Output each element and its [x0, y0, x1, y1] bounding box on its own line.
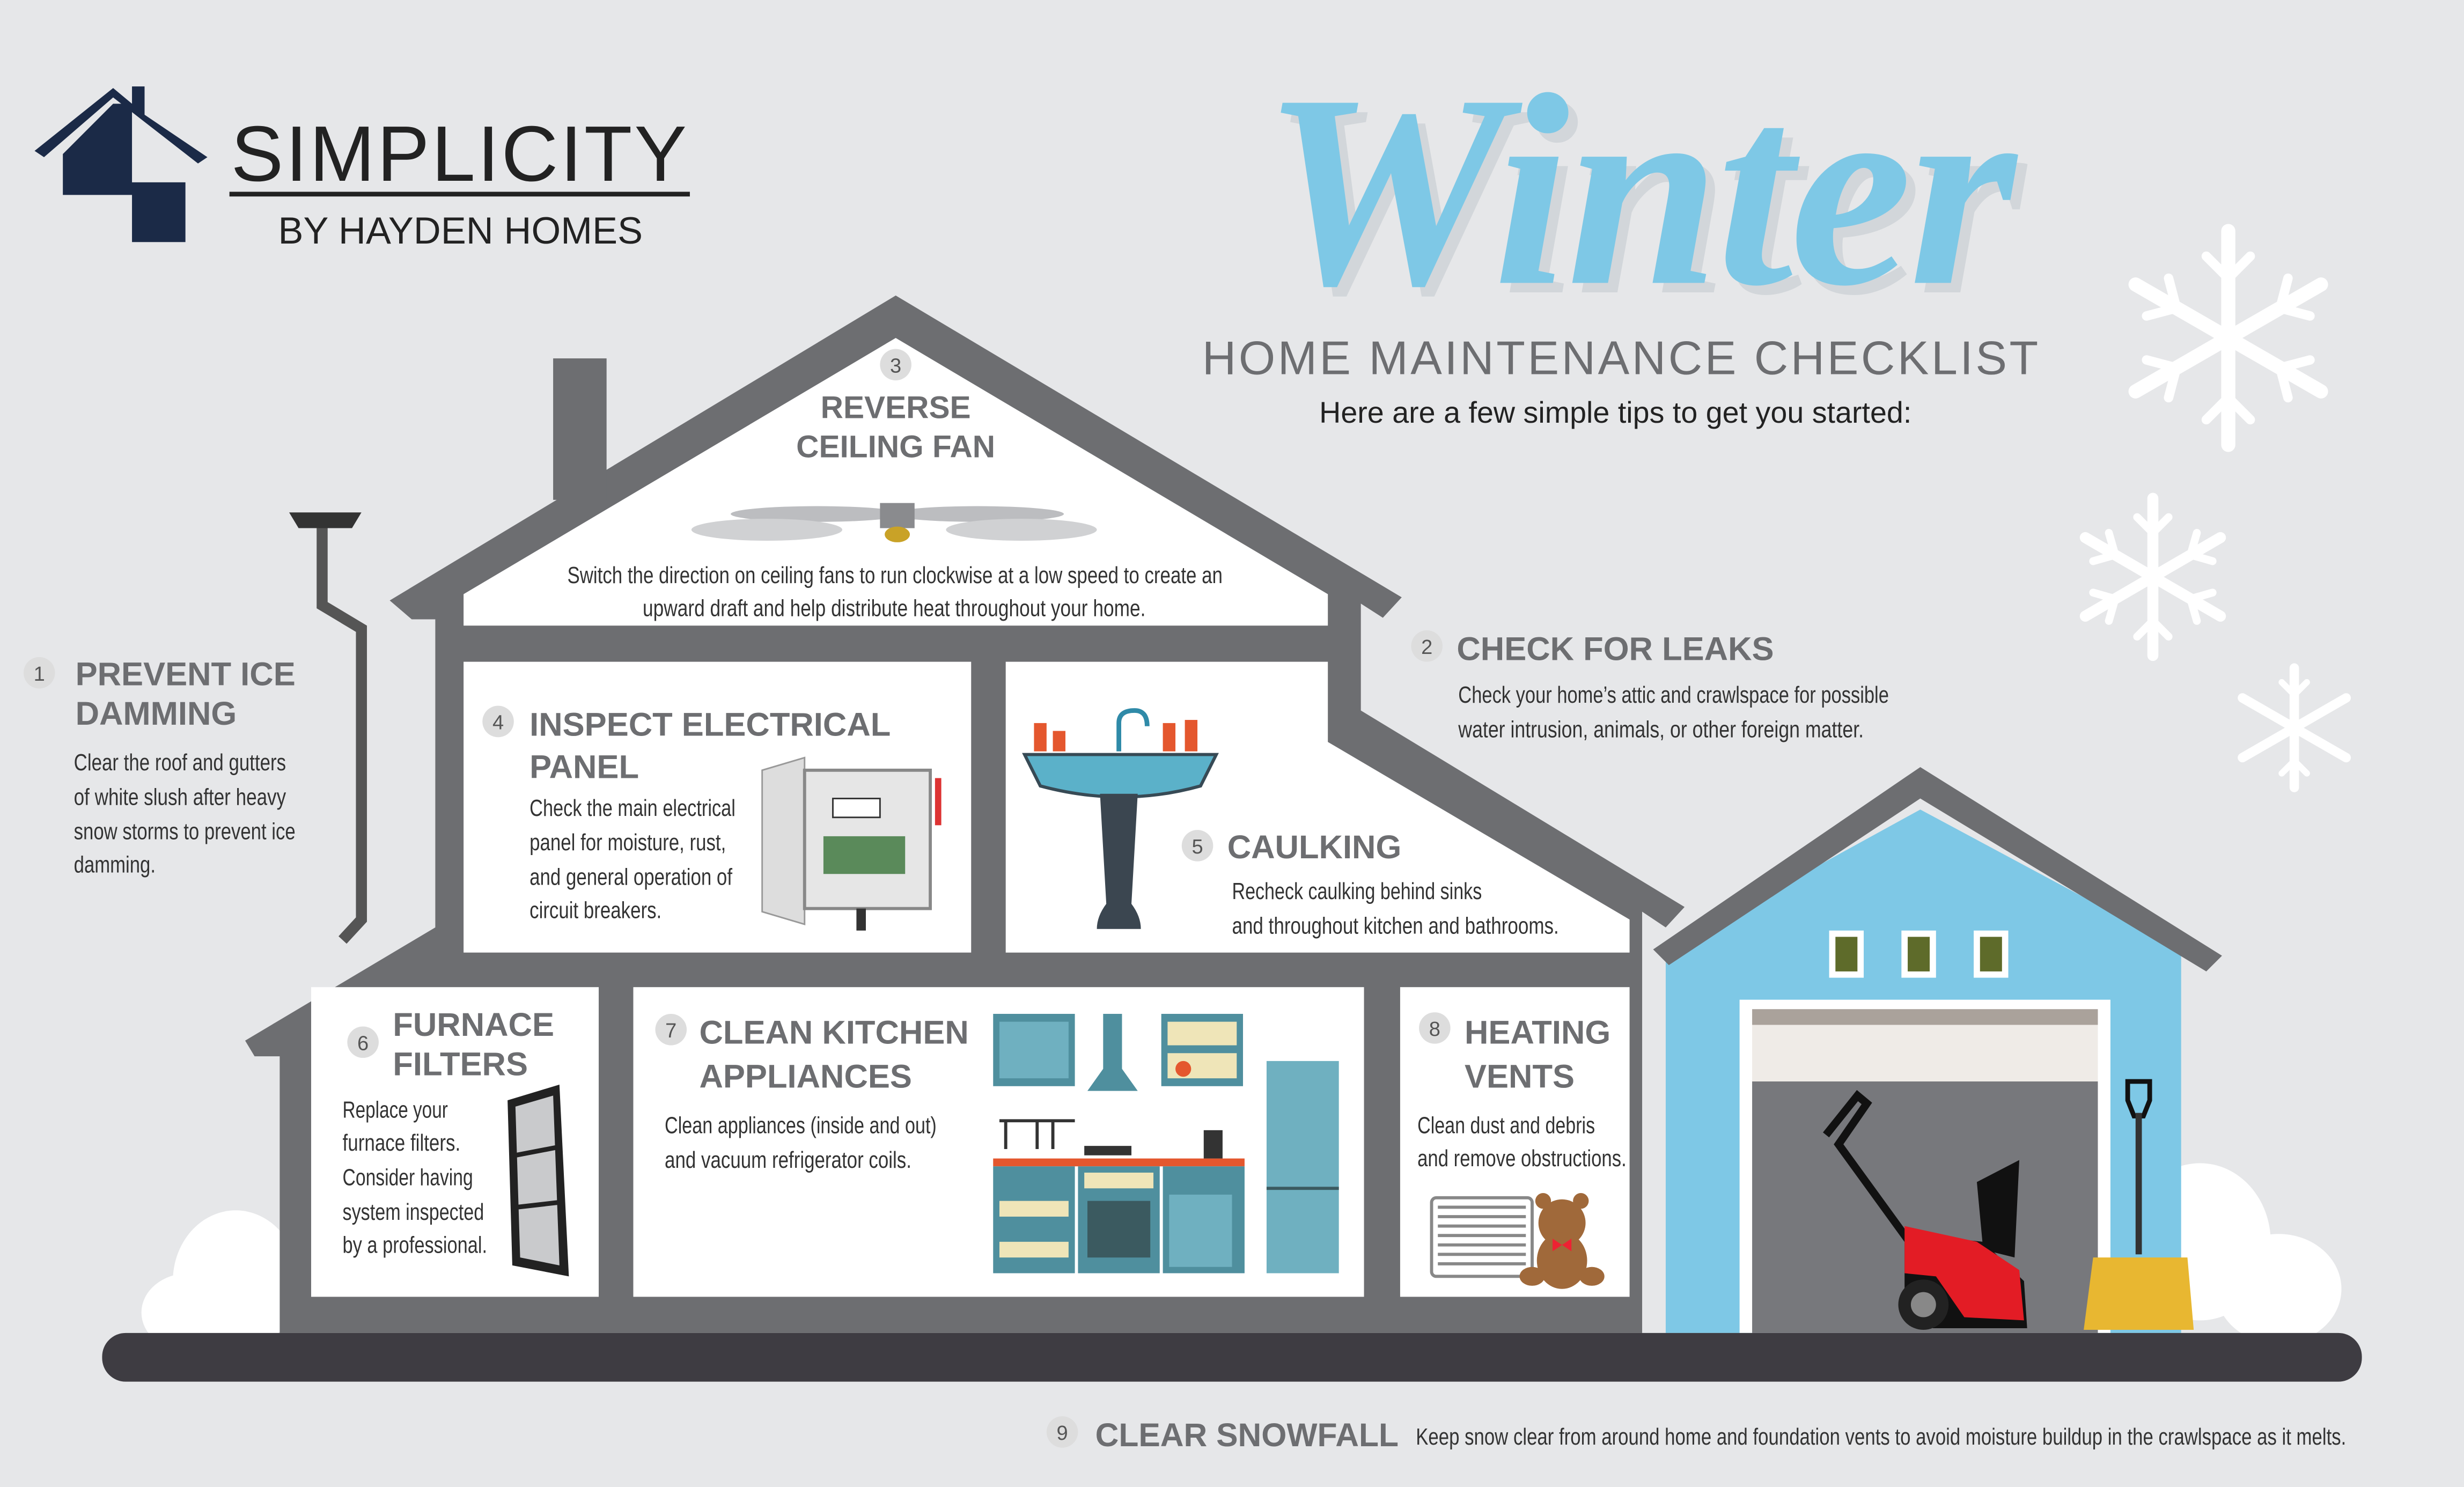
title: Winter: Winter: [1271, 47, 2031, 352]
panel: heating vents (8): and remove obstructions.: [1417, 1145, 1627, 1172]
panel: electrical (4): and general operation of: [529, 864, 733, 890]
panel: heating vents (8): 8: [1429, 1018, 1440, 1041]
text block: 1 prevent ice damming: Clear the roof and gutters: [74, 749, 286, 776]
panel: kitchen (7): [633, 987, 1364, 1297]
icon: snow blower: [1826, 1095, 2027, 1330]
text block: 1 prevent ice damming: of white slush after heavy: [74, 784, 286, 810]
panel: caulking (5): Recheck caulking behind sinks: [1232, 878, 1482, 904]
panel: electrical (4): [464, 662, 971, 953]
panel: furnace filters (6): Replace your: [343, 1096, 448, 1123]
text block: 2 check for leaks: 2: [1421, 636, 1432, 659]
panel: heating vents (8): [1400, 987, 1630, 1297]
panel: electrical (4): 4: [492, 712, 504, 734]
text block: 1 prevent ice damming: [24, 656, 296, 878]
text block: 2 check for leaks: [1411, 630, 1889, 742]
panel: heating vents (8): Clean dust and debris: [1417, 1113, 1595, 1139]
panel: kitchen (7): Clean appliances (inside and out): [665, 1113, 937, 1139]
ground bar: [102, 1333, 2362, 1382]
snow clouds: [142, 1163, 2342, 1352]
icon: filter: [507, 1085, 569, 1276]
panel: furnace filters (6): Consider having: [343, 1164, 473, 1190]
text block: 9 clear snowfall: 9: [1057, 1422, 1068, 1445]
icon: vent and teddy bear: [1432, 1193, 1605, 1289]
garage: [1653, 767, 2222, 1333]
panel: attic (3): Switch the direction on ceiling fans to run clockwise at a low speed to create an: [567, 562, 1223, 588]
text block: 2 check for leaks: Check your home’s attic and crawlspace for possible: [1458, 682, 1889, 708]
panel: electrical (4): circuit breakers.: [529, 897, 661, 923]
panel: caulking (5): [1006, 662, 1630, 953]
text block: 9 clear snowfall: CLEAR SNOWFALL: [1095, 1417, 1399, 1454]
panel: attic (3): CEILING FAN: [796, 430, 995, 465]
subtitle: [1202, 331, 2038, 429]
panel: furnace filters (6): system inspected: [343, 1199, 484, 1225]
panel: attic (3): REVERSE: [821, 390, 971, 425]
text block: 9 clear snowfall: [1047, 1416, 2346, 1454]
panel: electrical (4): INSPECT ELECTRICAL: [529, 706, 891, 743]
text block: 2 check for leaks: CHECK FOR LEAKS: [1457, 631, 1774, 668]
subtitle: Here are a few simple tips to get you started:: [1319, 396, 1911, 429]
icon: kitchen: [993, 1014, 1339, 1273]
panel: electrical (4): Check the main electrical: [529, 795, 735, 821]
panel: furnace filters (6): by a professional.: [343, 1232, 487, 1258]
icon: electrical panel: [762, 757, 942, 931]
logo: BY HAYDEN HOMES: [278, 209, 643, 252]
text block: 2 check for leaks: water intrusion, animals, or other foreign matter.: [1458, 716, 1864, 742]
panel: kitchen (7): CLEAN KITCHEN: [699, 1014, 969, 1051]
text block: 1 prevent ice damming: 1: [34, 663, 45, 686]
text block: 1 prevent ice damming: DAMMING: [76, 695, 237, 732]
text block: 1 prevent ice damming: snow storms to prevent ice: [74, 819, 296, 845]
logo: SIMPLICITY: [231, 110, 687, 198]
panel: kitchen (7): APPLIANCES: [699, 1058, 912, 1095]
panel: furnace filters (6): furnace filters.: [343, 1130, 460, 1156]
panel: kitchen (7): and vacuum refrigerator coils.: [665, 1147, 911, 1173]
icon: snowflakes: [2085, 231, 2346, 787]
subtitle: HOME MAINTENANCE CHECKLIST: [1202, 331, 2038, 384]
text block: 1 prevent ice damming: PREVENT ICE: [76, 656, 296, 693]
panel: furnace filters (6): 6: [357, 1032, 369, 1055]
panel: attic (3): [464, 338, 1328, 625]
panel: electrical (4): panel for moisture, rust,: [529, 829, 726, 856]
panel: caulking (5): and throughout kitchen and bathrooms.: [1232, 913, 1559, 939]
icon: sink: [1025, 710, 1216, 929]
panel: attic (3): upward draft and help distribute heat throughout your home.: [643, 595, 1145, 622]
panel: caulking (5): 5: [1191, 836, 1203, 858]
icon: ceiling fan: [692, 503, 1097, 542]
house structure: [245, 296, 1685, 1333]
title: Winter: Winter: [1262, 38, 2021, 342]
panel: heating vents (8): HEATING: [1465, 1014, 1610, 1051]
panel: attic (3): 3: [890, 355, 901, 377]
panel: heating vents (8): VENTS: [1465, 1058, 1575, 1095]
panel: furnace filters (6): [311, 987, 599, 1297]
panel: furnace filters (6): FURNACE: [393, 1006, 554, 1043]
panel: electrical (4): PANEL: [529, 748, 639, 785]
text block: 1 prevent ice damming: damming.: [74, 851, 156, 878]
panel: kitchen (7): 7: [665, 1020, 676, 1042]
icon: shovel: [2084, 1081, 2194, 1330]
downspout: [289, 512, 362, 940]
logo: [34, 86, 690, 252]
panel: caulking (5): CAULKING: [1227, 829, 1401, 866]
panel: furnace filters (6): FILTERS: [393, 1046, 528, 1083]
